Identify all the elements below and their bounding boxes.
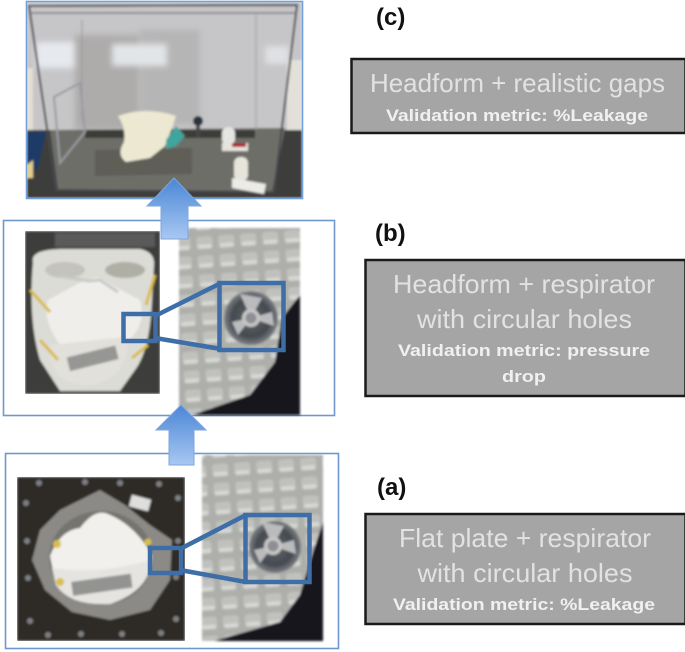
- text box: stage (a) description: [366, 514, 685, 624]
- arrow: stage (b) to stage (c): [147, 178, 201, 239]
- photo: headform in clear enclosure (c): [26, 2, 302, 198]
- text box: stage (a) description: with circular holes: [416, 558, 632, 588]
- photo: fabric close-up with hole: [179, 228, 300, 415]
- photo: fabric close-up with hole: [202, 455, 323, 641]
- photo: headform wearing respirator: [25, 231, 160, 394]
- heading: label (c): (c): [376, 4, 405, 31]
- panel: stage (a) frame with photos: [6, 454, 338, 648]
- text box: stage (b) description: Validation metric: pressure: [398, 341, 650, 360]
- text box: stage (b) description: drop: [502, 367, 546, 386]
- photo: flat plate with respirator: [17, 477, 185, 641]
- text box: stage (c) description: Headform + realistic gaps: [370, 68, 665, 98]
- heading: label (a): (a): [377, 474, 406, 501]
- heading: label (b): (b): [375, 220, 406, 247]
- text box: stage (a) description: Flat plate + respirator: [399, 523, 651, 553]
- text box: stage (c) description: Validation metric: %Leakage: [386, 106, 648, 125]
- text box: stage (b) description: [366, 260, 685, 396]
- panel: stage (b) frame with photos: [4, 220, 334, 416]
- callout: zoom box linking respirator to close-up: [124, 283, 284, 350]
- arrow: stage (a) to stage (b): [156, 405, 206, 465]
- text box: stage (c) description: [352, 59, 685, 133]
- text box: stage (a) description: Validation metric: %Leakage: [393, 595, 655, 614]
- text box: stage (b) description: with circular holes: [416, 304, 632, 334]
- text box: stage (b) description: Headform + respirator: [393, 269, 655, 299]
- callout: zoom box linking respirator to close-up: [150, 515, 310, 582]
